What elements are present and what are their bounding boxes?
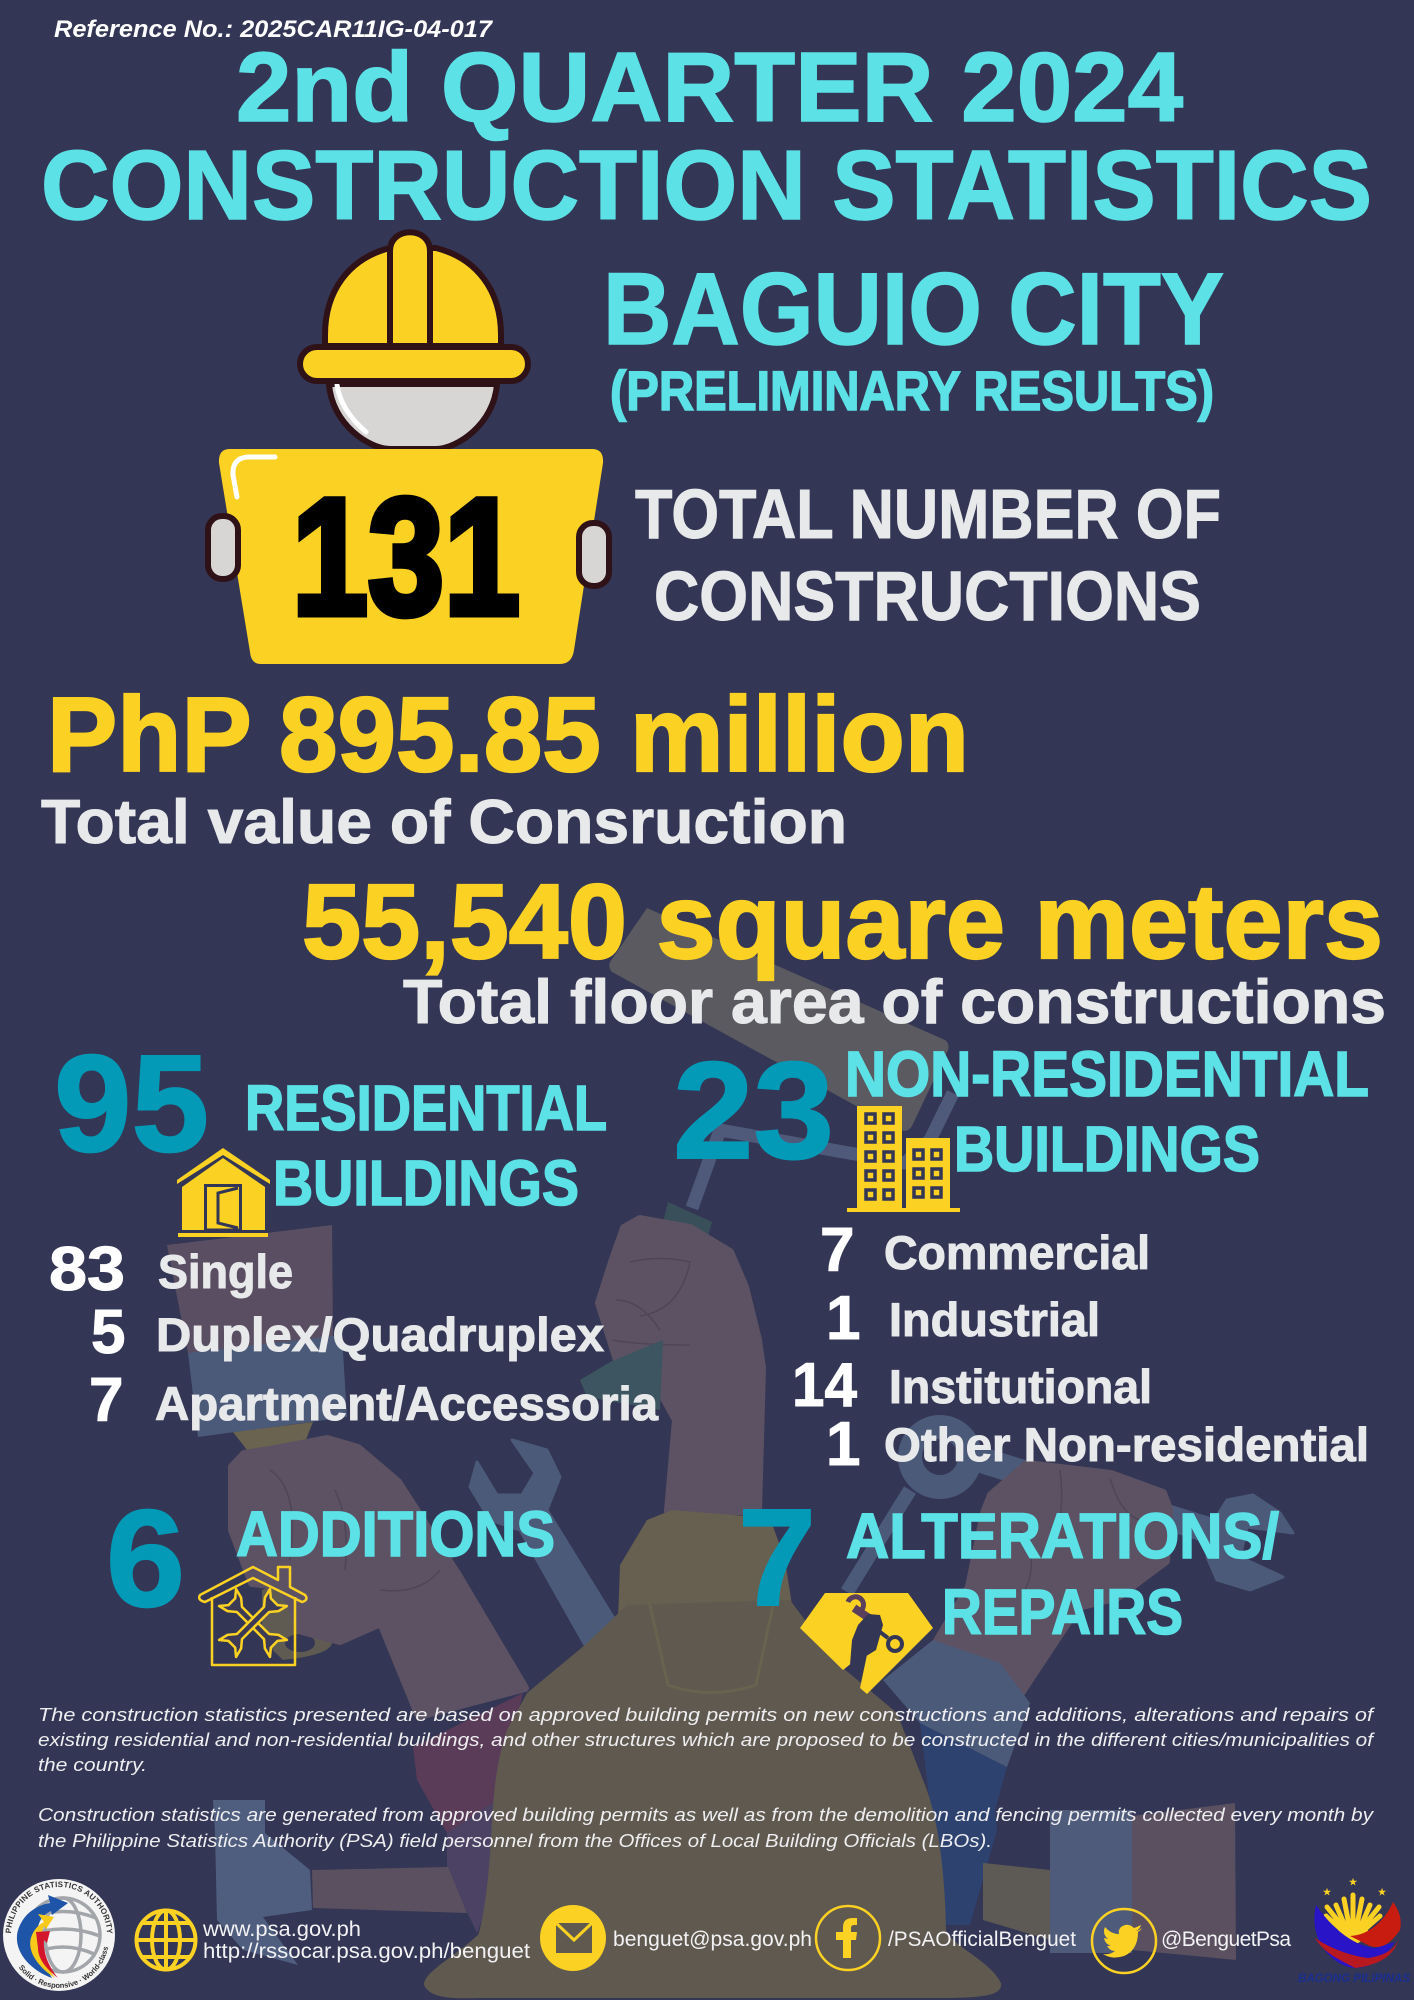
footer: website: www.psa.gov.ph xyxy=(202,1918,361,1941)
location heading: (PRELIMINARY RESULTS) xyxy=(610,359,1214,422)
panel: non-residential buildings xyxy=(673,1034,1369,1479)
total value xyxy=(41,676,969,857)
residential breakdown: Single xyxy=(158,1245,293,1298)
footer: Bagong Pilipinas logo xyxy=(1298,1877,1410,1985)
location heading xyxy=(603,252,1224,422)
panel: additions: ADDITIONS xyxy=(236,1498,555,1570)
total number: 131 xyxy=(292,465,520,650)
left raised fist and arm xyxy=(232,1439,525,1716)
total value: PhP 895.85 million xyxy=(47,676,969,794)
icon: globe xyxy=(136,1910,196,1970)
paint brush xyxy=(167,1225,347,1660)
sign highlight xyxy=(233,457,275,497)
non-residential breakdown: 14 xyxy=(792,1351,857,1420)
red sphere bands xyxy=(1350,1902,1401,1947)
center hand and arm xyxy=(599,1219,762,1511)
footer: Bagong Pilipinas logo: BAGONG PILIPINAS xyxy=(1298,1973,1410,1985)
panel: residential buildings: BUILDINGS xyxy=(273,1147,579,1219)
panel: residential buildings: RESIDENTIAL xyxy=(245,1072,607,1144)
total floor area: Total floor area of constructions xyxy=(403,968,1386,1037)
hard hat brim xyxy=(300,347,528,381)
footer: Bagong Pilipinas logo: ★ xyxy=(1378,1887,1387,1897)
footer: email xyxy=(540,1905,812,1971)
panel: additions xyxy=(106,1482,555,1665)
right hand xyxy=(579,523,609,586)
non-residential breakdown: Commercial xyxy=(884,1226,1150,1279)
footer: website: http://rssocar.psa.gov.ph/benguet xyxy=(203,1940,530,1963)
residential breakdown: 5 xyxy=(91,1298,125,1367)
left hand xyxy=(208,516,238,579)
sign board xyxy=(219,449,603,664)
footer: Bagong Pilipinas logo: ★ xyxy=(1323,1887,1332,1897)
icon: twitter bird xyxy=(1092,1909,1156,1973)
total floor area: 55,540 square meters xyxy=(302,863,1383,981)
icon: office buildings xyxy=(847,1106,960,1212)
footer: website xyxy=(136,1910,530,1970)
panel: additions: 6 xyxy=(106,1482,185,1636)
residential breakdown: Apartment/Accessoria xyxy=(155,1377,659,1430)
right raised fist and arm xyxy=(937,1464,1169,1693)
residential breakdown: 7 xyxy=(89,1366,123,1435)
icon: facebook xyxy=(816,1906,880,1970)
right wrenches xyxy=(847,1427,1293,1592)
center plaid cuff xyxy=(618,1510,792,1620)
non-residential breakdown: Institutional xyxy=(889,1360,1152,1413)
title xyxy=(41,32,1372,240)
icon: envelope xyxy=(540,1905,606,1971)
explanatory notes: the Philippine Statistics Authority (PSA) field personnel from the Offices of Local Building Officials (LBOs). xyxy=(38,1830,992,1851)
total constructions label: TOTAL NUMBER OF xyxy=(635,475,1221,553)
total floor area xyxy=(302,863,1386,1037)
left wrench xyxy=(470,1440,618,1645)
non-residential breakdown xyxy=(792,1216,1369,1479)
footer: facebook: /PSAOfficialBenguet xyxy=(888,1928,1076,1951)
hard hat ridge xyxy=(390,232,430,346)
left hammer xyxy=(213,1800,467,1965)
sun rays xyxy=(1326,1895,1380,1930)
panel: alterations and repairs: ALTERATIONS/ xyxy=(846,1500,1279,1572)
location heading: BAGUIO CITY xyxy=(603,252,1224,366)
right hammer xyxy=(983,1803,1236,1960)
residential breakdown: 83 xyxy=(49,1235,125,1304)
footer: email: benguet@psa.gov.ph xyxy=(613,1928,812,1951)
total value: Total value of Consruction xyxy=(41,788,847,857)
green tool handle below fist xyxy=(580,1340,663,1410)
total constructions label xyxy=(635,475,1221,635)
icon: house xyxy=(177,1148,270,1237)
worker head xyxy=(329,384,497,449)
right sleeve xyxy=(883,1640,1030,1925)
panel: alterations and repairs xyxy=(738,1481,1279,1694)
background illustration: hands holding tools around a hard hat xyxy=(167,908,1293,1998)
panel: residential buildings: 95 xyxy=(54,1027,209,1181)
explanatory notes: Construction statistics are generated from approved building permits as well as from the demolition and fencing permits collected every month by xyxy=(38,1804,1375,1825)
explanatory notes: The construction statistics presented are based on approved building permits on new constructions and additions, alterations and repairs of xyxy=(38,1704,1375,1725)
non-residential breakdown: 7 xyxy=(820,1216,854,1285)
explanatory notes xyxy=(38,1704,1375,1851)
title: 2nd QUARTER 2024 xyxy=(236,32,1183,142)
footer: PSA seal: Solid · Responsive · World-class xyxy=(19,1946,108,1990)
panel: alterations and repairs: 7 xyxy=(738,1481,816,1635)
footer: Bagong Pilipinas logo: ★ xyxy=(1349,1877,1358,1887)
icon: house with crossed wrenches xyxy=(199,1567,306,1665)
icon: fist with wrench badge xyxy=(800,1593,933,1694)
left sleeve xyxy=(413,1693,523,1833)
panel: non-residential buildings: 23 xyxy=(673,1034,834,1188)
panel: residential buildings xyxy=(49,1027,659,1435)
non-residential breakdown: Industrial xyxy=(889,1293,1100,1346)
hard hat xyxy=(424,1600,1001,1998)
title: CONSTRUCTION STATISTICS xyxy=(41,130,1372,240)
footer: PSA seal: PHILIPPINE STATISTICS AUTHORITY xyxy=(6,1882,112,1934)
explanatory notes: the country. xyxy=(38,1754,147,1775)
explanatory notes: existing residential and non-residential buildings, and other structures which are proposed to be constructed in the different cities/municipalities of xyxy=(38,1729,1375,1750)
footer: facebook xyxy=(816,1906,1076,1970)
panel: alterations and repairs: REPAIRS xyxy=(942,1576,1183,1648)
footer: PSA seal xyxy=(3,1879,115,1991)
residential breakdown: Duplex/Quadruplex xyxy=(156,1308,604,1361)
non-residential breakdown: 1 xyxy=(826,1410,860,1479)
non-residential breakdown: Other Non-residential xyxy=(884,1418,1369,1471)
panel: non-residential buildings: BUILDINGS xyxy=(954,1113,1260,1185)
non-residential breakdown: 1 xyxy=(826,1284,860,1353)
paint roller xyxy=(609,908,953,1250)
icon: construction worker holding sign xyxy=(208,232,609,664)
reference number: Reference No.: 2025CAR11IG-04-017 xyxy=(54,16,494,43)
total constructions label: CONSTRUCTIONS xyxy=(654,557,1201,635)
blue sphere bands xyxy=(1314,1905,1395,1968)
residential breakdown xyxy=(49,1235,659,1435)
hard hat dome xyxy=(325,248,501,346)
footer: twitter: @BenguetPsa xyxy=(1161,1928,1291,1951)
footer: twitter xyxy=(1092,1909,1291,1973)
